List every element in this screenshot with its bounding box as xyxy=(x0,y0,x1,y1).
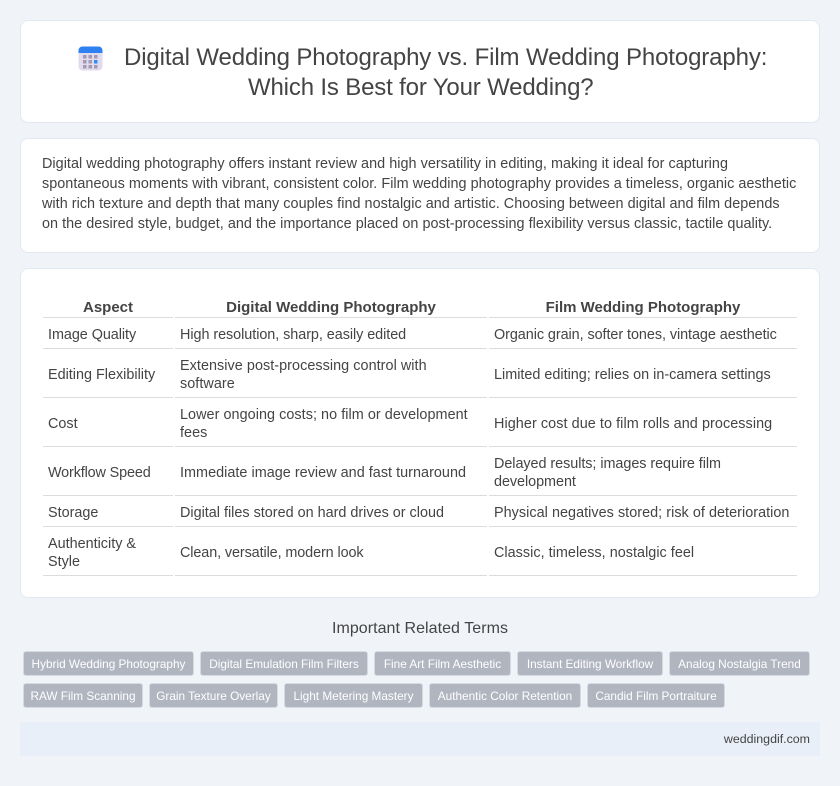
introduction text: with rich texture and depth that many couples find nostalgic and artistic. Choosing between digital and film depends xyxy=(42,196,780,212)
tag: Instant Editing Workflow xyxy=(527,657,653,671)
tag xyxy=(587,683,725,708)
tag list xyxy=(23,651,810,708)
row: storage: Storage xyxy=(48,505,98,521)
header row: Aspect xyxy=(83,298,133,316)
row: authenticity and style: Authenticity & xyxy=(48,536,136,552)
row: storage: Physical negatives stored; risk of deterioration xyxy=(494,505,789,521)
footer bar xyxy=(20,722,820,756)
row: storage: Digital files stored on hard drives or cloud xyxy=(180,505,444,521)
header row: Digital Wedding Photography xyxy=(226,298,436,316)
row: authenticity and style xyxy=(48,536,694,570)
row: workflow speed: Immediate image review and fast turnaround xyxy=(180,465,466,481)
row: image quality: High resolution, sharp, easily edited xyxy=(180,327,406,343)
tag xyxy=(23,651,194,676)
introduction text: Digital wedding photography offers instant review and high versatility in editing, making it ideal for capturing xyxy=(42,156,728,172)
tag xyxy=(284,683,423,708)
row: cost: Cost xyxy=(48,416,78,432)
title: Which Is Best for Your Wedding? xyxy=(248,74,593,101)
row: editing flexibility: Editing Flexibility xyxy=(48,367,155,383)
tag: Hybrid Wedding Photography xyxy=(32,657,185,671)
tag xyxy=(23,683,143,708)
header row xyxy=(83,298,740,316)
row: cost xyxy=(48,407,772,441)
tag xyxy=(669,651,810,676)
introduction text: spontaneous moments with vibrant, consistent color. Film wedding photography provides a timeless, organic aesthetic xyxy=(42,176,796,192)
row: workflow speed: Workflow Speed xyxy=(48,465,151,481)
panel: title card xyxy=(20,20,820,123)
tag xyxy=(374,651,511,676)
tag: RAW Film Scanning xyxy=(30,689,136,703)
row: authenticity and style: Clean, versatile, modern look xyxy=(180,545,363,561)
row: cost: fees xyxy=(180,425,207,441)
row: workflow speed xyxy=(48,456,721,490)
tag xyxy=(200,651,368,676)
panel: introduction xyxy=(20,138,820,253)
panel: comparison table xyxy=(20,268,820,598)
row: workflow speed: development xyxy=(494,474,576,490)
tag: Analog Nostalgia Trend xyxy=(678,657,801,671)
row: editing flexibility: Extensive post-processing control with xyxy=(180,358,427,374)
row: cost: Lower ongoing costs; no film or development xyxy=(180,407,468,423)
row: editing flexibility xyxy=(48,358,771,392)
tag: Light Metering Mastery xyxy=(294,689,414,703)
tag: Fine Art Film Aesthetic xyxy=(384,657,501,671)
row: storage xyxy=(48,505,789,521)
tag: Digital Emulation Film Filters xyxy=(209,657,359,671)
row: cost: Higher cost due to film rolls and processing xyxy=(494,416,772,432)
tag: Authentic Color Retention xyxy=(438,689,572,703)
comparison table xyxy=(43,298,797,576)
row: editing flexibility: Limited editing; relies on in-camera settings xyxy=(494,367,771,383)
tag xyxy=(429,683,581,708)
introduction text xyxy=(42,156,796,232)
tag xyxy=(149,683,278,708)
tag: Grain Texture Overlay xyxy=(156,689,271,703)
row: image quality: Organic grain, softer tones, vintage aesthetic xyxy=(494,327,777,343)
row: image quality xyxy=(48,327,777,343)
heading: important related terms: Important Related Terms xyxy=(332,620,508,637)
tag xyxy=(517,651,663,676)
row: workflow speed: Delayed results; images require film xyxy=(494,456,721,472)
footer source: weddingdif.com xyxy=(724,732,810,746)
introduction text: on the desired style, budget, and the importance placed on post-processing flexibility versus classic, tactile quality. xyxy=(42,216,772,232)
title xyxy=(124,44,767,101)
header row: Film Wedding Photography xyxy=(546,298,740,316)
title: Digital Wedding Photography vs. Film Wedding Photography: xyxy=(124,44,767,71)
row: authenticity and style: Style xyxy=(48,554,80,570)
icon: calendar xyxy=(78,46,102,70)
row: authenticity and style: Classic, timeless, nostalgic feel xyxy=(494,545,694,561)
row: image quality: Image Quality xyxy=(48,327,136,343)
tag: Candid Film Portraiture xyxy=(595,689,717,703)
row: editing flexibility: software xyxy=(180,376,235,392)
